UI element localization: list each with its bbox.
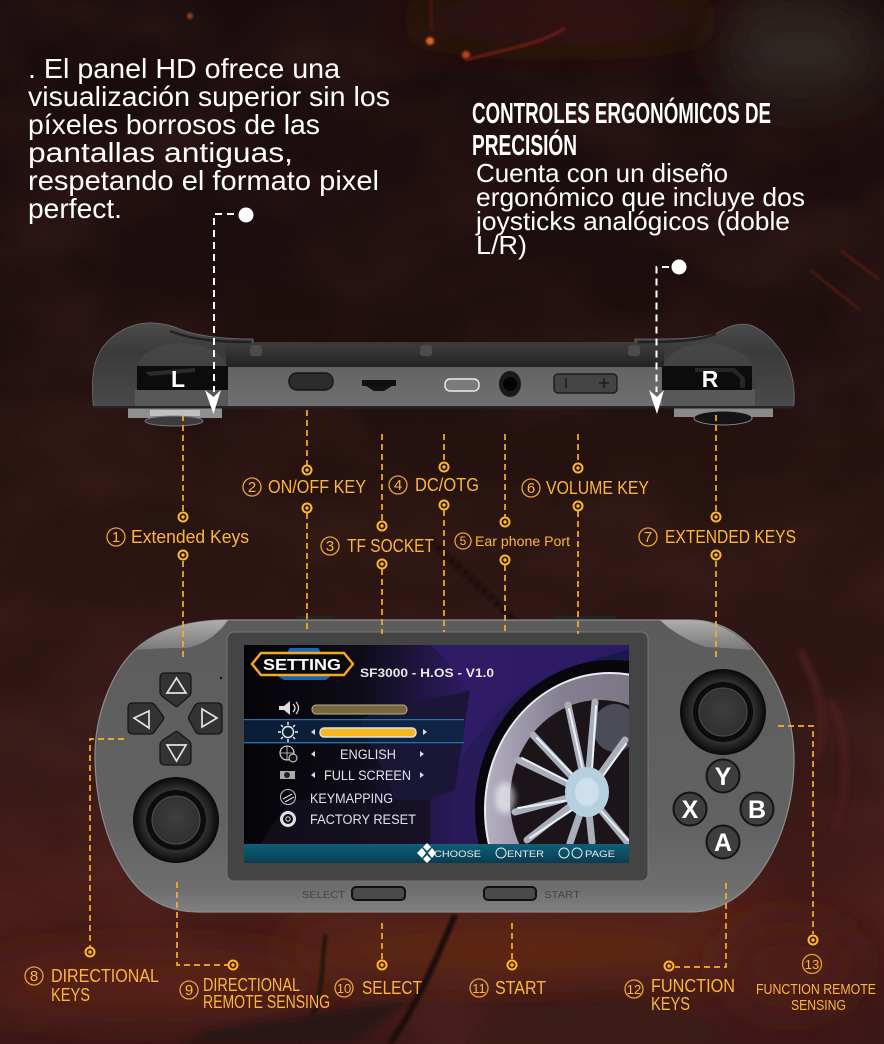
heading: ergonomic controls: [472, 96, 771, 162]
setting logo: [252, 648, 353, 680]
main console: [94, 616, 795, 913]
text block: ergonomic description: Cuenta con un diseño: [476, 158, 728, 188]
select button: [302, 887, 405, 901]
face button A: [706, 826, 740, 858]
left shoulder window L: [137, 366, 228, 392]
callout 2: on/off key: 2: [248, 479, 256, 496]
footer bar: CHOOSE: [434, 849, 481, 859]
wheel: [475, 660, 629, 844]
callout 5: earphone port: 5: [460, 534, 467, 548]
callout 12: function keys: 12: [627, 982, 641, 997]
left shoulder: [136, 620, 228, 650]
blue highlight band: [244, 720, 464, 744]
firmware label: SF3000 - H.OS - V1.0: [360, 666, 494, 680]
console upper shell: [92, 323, 794, 408]
DC/OTG port: [445, 379, 479, 391]
callout 11: start: 11: [472, 981, 486, 996]
face button Y: [706, 760, 740, 792]
text block: HD panel description: . El panel HD ofrece una: [28, 53, 340, 84]
callout 7: extended keys right: 7: [644, 529, 652, 546]
callout 1: extended keys: [107, 415, 249, 658]
screen bezel: [227, 632, 648, 881]
callout 6: volume key: [522, 434, 649, 634]
callout 10: select: SELECT: [362, 978, 422, 998]
callout 12: function keys: [625, 883, 735, 1014]
callout 7: extended keys right: [639, 415, 796, 658]
text block: ergonomic description: [475, 158, 805, 260]
d-pad down: [160, 731, 191, 765]
callout 12: function keys: FUNCTION: [651, 976, 735, 996]
callout 9: directional remote sensing: [177, 882, 330, 1012]
callout 4: DC/OTG: 4: [394, 477, 402, 494]
callout 1: extended keys: 1: [112, 529, 120, 546]
console body: [95, 620, 794, 912]
right shoulder window R: R: [702, 366, 719, 392]
callout 8: directional keys: DIRECTIONAL: [51, 966, 159, 986]
right shoulder slit: [638, 334, 716, 342]
left joystick: [133, 777, 219, 863]
callout 13: function remote sensing: [756, 726, 876, 1014]
callout 7: extended keys right: EXTENDED KEYS: [665, 527, 796, 547]
left shoulder slit: [170, 331, 251, 342]
top buttons: [297, 616, 616, 622]
footer bar: PAGE: [585, 849, 615, 859]
right shoulder: [660, 620, 752, 650]
face button B: B: [748, 796, 766, 824]
right joystick: [680, 669, 766, 755]
menu: language row: [280, 746, 424, 762]
menu: screen mode row: FULL SCREEN: [324, 768, 411, 783]
callout 3: TF socket: 3: [326, 538, 334, 555]
text block: ergonomic description: joysticks analógicos (doble: [475, 206, 790, 236]
callout 4: DC/OTG: [389, 434, 479, 632]
start button: [484, 887, 581, 901]
text block: HD panel description: visualización superior sin los: [28, 81, 390, 112]
central dark band: [226, 343, 664, 368]
text block: ergonomic description: L/R): [476, 230, 527, 260]
callout 11: start: [470, 923, 546, 998]
case nubs: [250, 345, 640, 356]
callout 5: earphone port: [455, 434, 570, 634]
d-pad left: [128, 703, 164, 734]
callout 2: on/off key: [243, 410, 366, 630]
text block: HD panel description: perfect.: [28, 193, 122, 224]
menu: brightness row: [278, 722, 427, 742]
callout 2: on/off key: ON/OFF KEY: [268, 477, 366, 497]
footer bar: [244, 843, 629, 863]
text block: HD panel description: respetando el formato pixel: [28, 165, 379, 196]
callout 8: directional keys: 8: [30, 968, 38, 985]
callout 9: directional remote sensing: DIRECTIONAL: [203, 975, 300, 995]
top view of console: [92, 323, 794, 426]
left bumper tray and stick: [128, 408, 222, 426]
earphone port: [499, 371, 521, 397]
callout 9: directional remote sensing: 9: [185, 982, 193, 999]
lower strip: [226, 367, 664, 407]
right dome: [662, 343, 755, 408]
callout 3: TF socket: TF SOCKET: [347, 536, 434, 556]
left shoulder window L: L: [171, 366, 185, 392]
callout 13: function remote sensing: 13: [805, 957, 819, 972]
callout 6: volume key: 6: [527, 480, 535, 497]
select button: SELECT: [302, 889, 346, 901]
callout 4: DC/OTG: DC/OTG: [415, 475, 479, 495]
callout 13: function remote sensing: SENSING: [791, 997, 846, 1014]
volume key: [554, 374, 617, 393]
start button: START: [544, 889, 581, 901]
text block: HD panel description: píxeles borrosos de las: [28, 109, 320, 140]
d-pad: [128, 673, 222, 765]
setting logo: SETTING: [263, 657, 341, 674]
callout 11: start: START: [495, 978, 546, 998]
callout 8: directional keys: KEYS: [51, 985, 90, 1005]
callout 6: volume key: VOLUME KEY: [546, 478, 649, 498]
callout 10: select: 10: [337, 981, 351, 996]
callout 3: TF socket: [321, 434, 434, 634]
menu: language row: ENGLISH: [340, 747, 396, 762]
menu: keymapping row: [280, 790, 393, 806]
menu: factory reset row: FACTORY RESET: [310, 812, 416, 827]
menu: volume row: [279, 701, 407, 715]
text block: ergonomic description: ergonómico que incluye dos: [476, 182, 805, 212]
callout 9: directional remote sensing: REMOTE SENSING: [203, 992, 330, 1012]
callout 8: directional keys: [25, 739, 159, 1005]
face button Y: Y: [715, 763, 732, 791]
text block: HD panel description: [28, 53, 390, 224]
right shoulder window R: [662, 366, 752, 392]
callout 10: select: [335, 923, 422, 998]
face button B: [740, 792, 774, 826]
d-pad up: [160, 673, 191, 707]
footer bar: ENTER: [507, 849, 545, 859]
on/off key: [289, 373, 333, 390]
pointer: controls arrow: [649, 260, 686, 414]
right bumper tray and stick: [674, 408, 773, 425]
callout 1: extended keys: Extended Keys: [131, 527, 249, 547]
heading: ergonomic controls: PRECISIÓN: [472, 128, 577, 162]
d-pad right: [188, 703, 222, 734]
face button A: A: [714, 829, 732, 857]
screen: [244, 645, 629, 863]
callout 12: function keys: KEYS: [651, 994, 690, 1014]
TF socket: [362, 380, 396, 391]
face button X: [674, 792, 706, 826]
menu: keymapping row: KEYMAPPING: [310, 791, 393, 806]
callout 5: earphone port: Ear phone Port: [475, 533, 570, 549]
text block: HD panel description: pantallas antiguas,: [28, 137, 293, 168]
menu: screen mode row: [280, 770, 424, 780]
left dome: [135, 343, 228, 408]
pointer: screen panel arrow: [205, 208, 254, 414]
face button X: X: [682, 796, 699, 824]
